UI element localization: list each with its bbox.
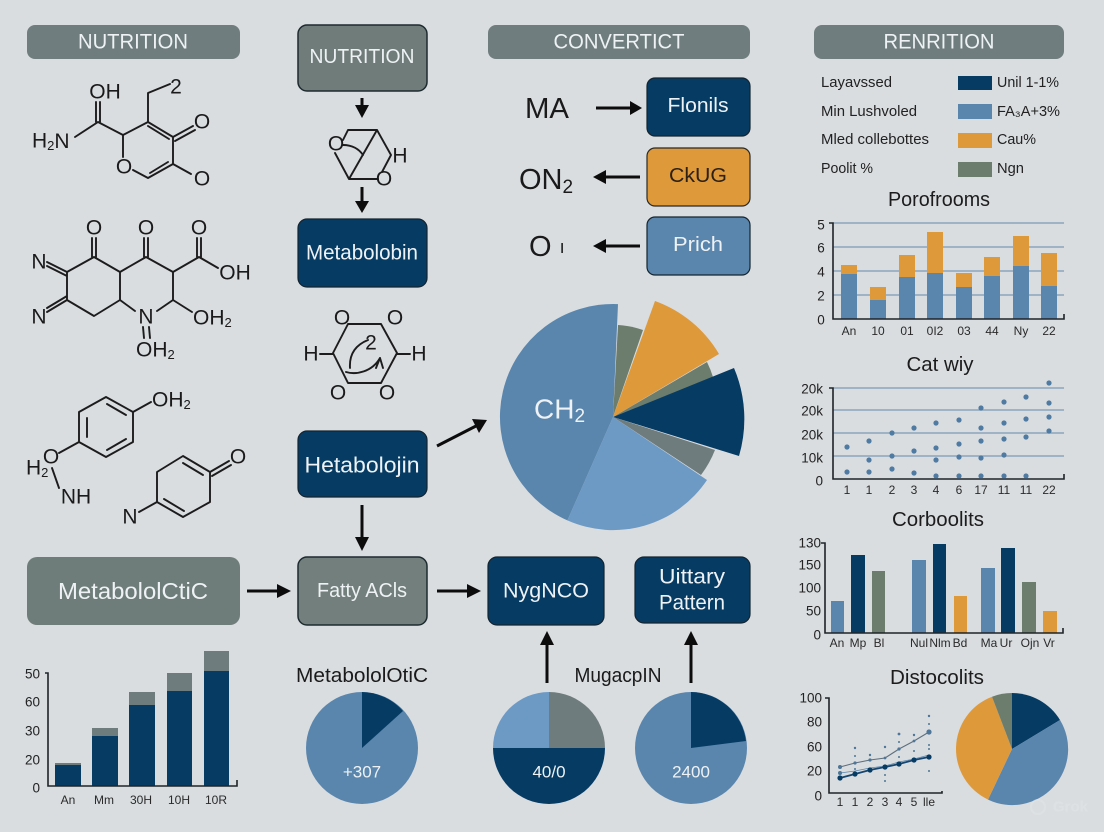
line chart: distocolits: 3 <box>882 795 889 809</box>
line chart: distocolits: 80 <box>807 714 822 730</box>
legend <box>821 75 1060 177</box>
arrow: ring down <box>355 187 369 213</box>
stacked bar chart: porofrooms: An <box>842 324 856 338</box>
stacked bar chart: porofrooms <box>817 218 1064 338</box>
stacked bar chart: bottom left <box>25 651 237 807</box>
line chart: distocolits: 100 <box>799 690 822 706</box>
flow box: flonils <box>647 78 750 136</box>
line chart: distocolits: 4 <box>896 795 903 809</box>
bar chart: corboolits: 0 <box>813 628 821 642</box>
scatter chart: cat wiy: 0 <box>815 474 823 488</box>
molecule: bridged ring <box>328 130 408 190</box>
line chart: distocolits: 2 <box>867 795 874 809</box>
chart: large pie: 2 <box>574 406 585 426</box>
flow box: ckug: CkUG <box>669 165 727 187</box>
molecule 1: N <box>54 130 70 152</box>
molecule: hexagon: 2 <box>365 332 377 354</box>
pie: 2400: 2400 <box>672 762 710 782</box>
pie: +307: +307 <box>343 762 381 782</box>
watermark: grok: Grok <box>1053 798 1089 816</box>
molecule 2: O <box>86 216 102 240</box>
molecule: hexagon: H <box>411 342 427 366</box>
flow box: metabolobin: Metabolobin <box>306 242 418 264</box>
molecule 1: O <box>194 110 210 134</box>
legend: Unil 1-1% <box>997 75 1059 91</box>
scatter chart: cat wiy: 17 <box>974 483 988 497</box>
line chart: distocolits: lle <box>923 795 935 809</box>
label: ON2: ON <box>519 164 562 196</box>
molecule 2: OH <box>136 338 168 362</box>
pie: 40/0: 40/0 <box>532 762 566 782</box>
flow box: fatty acids: Fatty ACls <box>317 580 407 602</box>
molecule 1 <box>32 76 210 190</box>
flow box: ckug <box>647 148 750 206</box>
header: renrition <box>814 25 1064 59</box>
header: renrition: RENRITION <box>884 30 994 54</box>
flow box: prich: Prich <box>673 234 723 256</box>
arrow: nutrition down <box>355 98 369 118</box>
arrow: up to nygnco <box>540 631 554 683</box>
molecule 2: O <box>191 216 207 240</box>
line chart: distocolits: 20 <box>807 764 822 778</box>
stacked bar chart: bottom left: 10R <box>205 793 227 807</box>
molecule 2 <box>31 216 251 362</box>
bar chart: corboolits: 50 <box>806 604 821 618</box>
scatter chart: cat wiy <box>801 380 1064 497</box>
stacked bar chart: porofrooms: 2 <box>817 288 825 304</box>
line chart: distocolits: 1 <box>852 795 859 809</box>
header: nutrition left: NUTRITION <box>78 30 188 54</box>
bar chart: corboolits: Vr <box>1043 636 1055 650</box>
bar chart: corboolits: Bl <box>874 636 884 650</box>
scatter chart: cat wiy: 11 <box>998 483 1011 497</box>
heading: mugacpin: MugacpIN <box>574 665 662 687</box>
line chart: distocolits: 1 <box>837 795 844 809</box>
arrow: prich to O <box>593 239 640 253</box>
arrow: ckug to ON2 <box>593 170 640 184</box>
pie: 2400 <box>635 692 747 804</box>
flow box: prich <box>647 217 750 275</box>
legend: Mled collebottes <box>821 132 929 148</box>
molecule 1: O <box>194 168 210 190</box>
flow box: nygnco <box>488 557 604 625</box>
legend: FA₃A+3% <box>997 104 1060 120</box>
arrow: hetabolojin down <box>355 505 369 551</box>
stacked bar chart: porofrooms: 44 <box>985 324 999 338</box>
flow box: metabolobin <box>298 219 427 287</box>
legend: Layavssed <box>821 75 892 91</box>
legend: Min Lushvoled <box>821 104 917 120</box>
molecule 4: N <box>122 506 138 528</box>
bar chart: corboolits: An <box>830 636 844 650</box>
stacked bar chart: porofrooms: Ny <box>1014 324 1028 338</box>
molecule 2: O <box>138 216 154 240</box>
bar chart: corboolits: Nlm <box>929 636 951 650</box>
molecule: hexagon: O <box>334 306 350 330</box>
stacked bar chart: porofrooms: 0I2 <box>927 324 944 338</box>
molecule 2: 2 <box>224 314 232 330</box>
watermark: grok <box>1031 798 1089 816</box>
header: convertict: CONVERTICT <box>554 30 685 54</box>
molecule 4 <box>122 446 246 528</box>
stacked bar chart: bottom left: 10H <box>168 793 190 807</box>
flow box: hetabolojin <box>298 431 427 497</box>
molecule 1: 2 <box>170 76 182 98</box>
stacked bar chart: porofrooms: 6 <box>817 240 825 256</box>
label: MA: MA <box>525 93 570 125</box>
legend: Ngn <box>997 161 1024 177</box>
flow box: uittary pattern <box>635 557 750 623</box>
molecule 1: O <box>116 156 132 178</box>
heading: distocolits: Distocolits <box>890 667 984 689</box>
bar chart: corboolits: Ojn <box>1021 636 1039 650</box>
flow box: metabololctic: MetabololCtiC <box>58 578 208 604</box>
line chart: distocolits: 5 <box>911 795 918 809</box>
legend: Cau% <box>997 132 1036 148</box>
molecule 2: 2 <box>168 346 175 362</box>
scatter chart: cat wiy: 4 <box>933 483 940 497</box>
scatter chart: cat wiy: 20k <box>801 428 823 442</box>
molecule 3: OH <box>152 388 184 412</box>
flow box: hetabolojin: Hetabolojin <box>304 452 420 478</box>
pie: +307 <box>306 692 418 804</box>
stacked bar chart: porofrooms: 01 <box>900 324 914 338</box>
heading: metabololotic: MetabololOtiC <box>296 665 428 687</box>
heading: corboolits: Corboolits <box>892 509 984 531</box>
stacked bar chart: porofrooms: 03 <box>957 324 971 338</box>
chart: large pie: CH <box>534 394 574 424</box>
flow box: uittary pattern: Uittary <box>659 566 726 588</box>
bar chart: corboolits: 100 <box>798 580 821 596</box>
molecule: bridged ring: H <box>392 144 408 168</box>
stacked bar chart: bottom left: 0 <box>32 780 40 796</box>
molecule 2: N <box>31 306 47 328</box>
molecule 2: N <box>31 250 47 274</box>
scatter chart: cat wiy: 20k <box>801 382 823 396</box>
molecule 1: OH <box>89 80 121 104</box>
stacked bar chart: bottom left: An <box>61 793 75 807</box>
pie: distocolits <box>956 693 1068 805</box>
molecule: bridged ring: O <box>328 132 344 156</box>
arrow: to fatty acids <box>247 584 291 598</box>
stacked bar chart: bottom left: 20 <box>25 752 40 768</box>
molecule: bridged ring: O <box>376 168 392 190</box>
molecule 3: O <box>43 446 59 468</box>
molecule 4: O <box>230 446 246 468</box>
heading: porofrooms: Porofrooms <box>888 189 990 211</box>
flow box: metabololctic <box>27 557 240 625</box>
bar chart: corboolits: 150 <box>798 558 821 572</box>
stacked bar chart: porofrooms: 0 <box>817 312 825 328</box>
header: nutrition left <box>27 25 240 59</box>
line chart: distocolits: 0 <box>814 788 822 804</box>
flow box: uittary pattern: Pattern <box>659 592 725 614</box>
scatter chart: cat wiy: 11 <box>1020 483 1033 497</box>
label: ON2: 2 <box>562 176 573 198</box>
stacked bar chart: bottom left: 30 <box>25 724 40 738</box>
bar chart: corboolits: 130 <box>798 536 821 550</box>
molecule 3: 2 <box>41 464 48 480</box>
scatter chart: cat wiy: 20k <box>801 404 823 418</box>
flow box: nutrition: NUTRITION <box>310 46 414 68</box>
flow box: fatty acids <box>298 557 427 625</box>
molecule 2: OH <box>193 306 224 330</box>
bar chart: corboolits: Nul <box>910 636 928 650</box>
scatter chart: cat wiy: 2 <box>889 483 896 497</box>
scatter chart: cat wiy: 6 <box>956 483 963 497</box>
scatter chart: cat wiy: 10k <box>801 450 823 466</box>
stacked bar chart: porofrooms: 22 <box>1042 324 1056 338</box>
line chart: distocolits <box>799 690 942 809</box>
molecule: hexagon <box>303 306 427 404</box>
flow box: nygnco: NygNCO <box>503 580 589 602</box>
arrow: to nygnco <box>437 584 481 598</box>
scatter chart: cat wiy: 1 <box>866 483 873 497</box>
molecule 1: 2 <box>47 138 54 152</box>
scatter chart: cat wiy: 1 <box>844 483 851 497</box>
flow box: nutrition <box>298 25 427 91</box>
scatter chart: cat wiy: 22 <box>1042 483 1056 497</box>
bar chart: corboolits: Ma <box>981 636 998 650</box>
molecule 3: 2 <box>184 396 191 412</box>
stacked bar chart: bottom left: 30H <box>130 793 152 807</box>
molecule: hexagon: O <box>379 382 395 404</box>
arrow: to pie <box>437 419 487 446</box>
legend: Poolit % <box>821 161 873 177</box>
scatter chart: cat wiy: 3 <box>911 483 918 497</box>
heading: cat wiy: Cat wiy <box>906 354 974 376</box>
molecule 1: H <box>32 130 47 152</box>
header: convertict <box>488 25 750 59</box>
stacked bar chart: bottom left: Mm <box>94 793 114 807</box>
chart: large pie <box>500 301 744 530</box>
molecule: hexagon: H <box>303 342 319 366</box>
bar chart: corboolits: Bd <box>953 636 967 650</box>
molecule 2: N <box>138 306 154 328</box>
stacked bar chart: porofrooms: 4 <box>817 264 825 280</box>
line chart: distocolits: 60 <box>807 740 822 754</box>
molecule 3: NH <box>61 486 91 508</box>
molecule 3: H <box>26 456 41 480</box>
molecule: hexagon: O <box>330 382 346 404</box>
bar chart: corboolits <box>798 536 1063 650</box>
label: O I: O ı <box>529 231 565 263</box>
molecule 2: OH <box>219 262 251 284</box>
molecule 3 <box>26 388 191 508</box>
arrow: MA to flonils <box>596 101 642 115</box>
molecule: hexagon: O <box>387 306 403 330</box>
flow box: flonils: Flonils <box>668 95 728 117</box>
stacked bar chart: bottom left: 50 <box>25 666 40 682</box>
bar chart: corboolits: Mp <box>850 636 867 650</box>
pie: 40/0 <box>493 692 605 804</box>
bar chart: corboolits: Ur <box>1000 636 1012 650</box>
arrow: up to uittary <box>684 631 698 683</box>
stacked bar chart: porofrooms: 5 <box>817 218 825 232</box>
stacked bar chart: bottom left: 60 <box>25 694 40 710</box>
stacked bar chart: porofrooms: 10 <box>871 324 885 338</box>
